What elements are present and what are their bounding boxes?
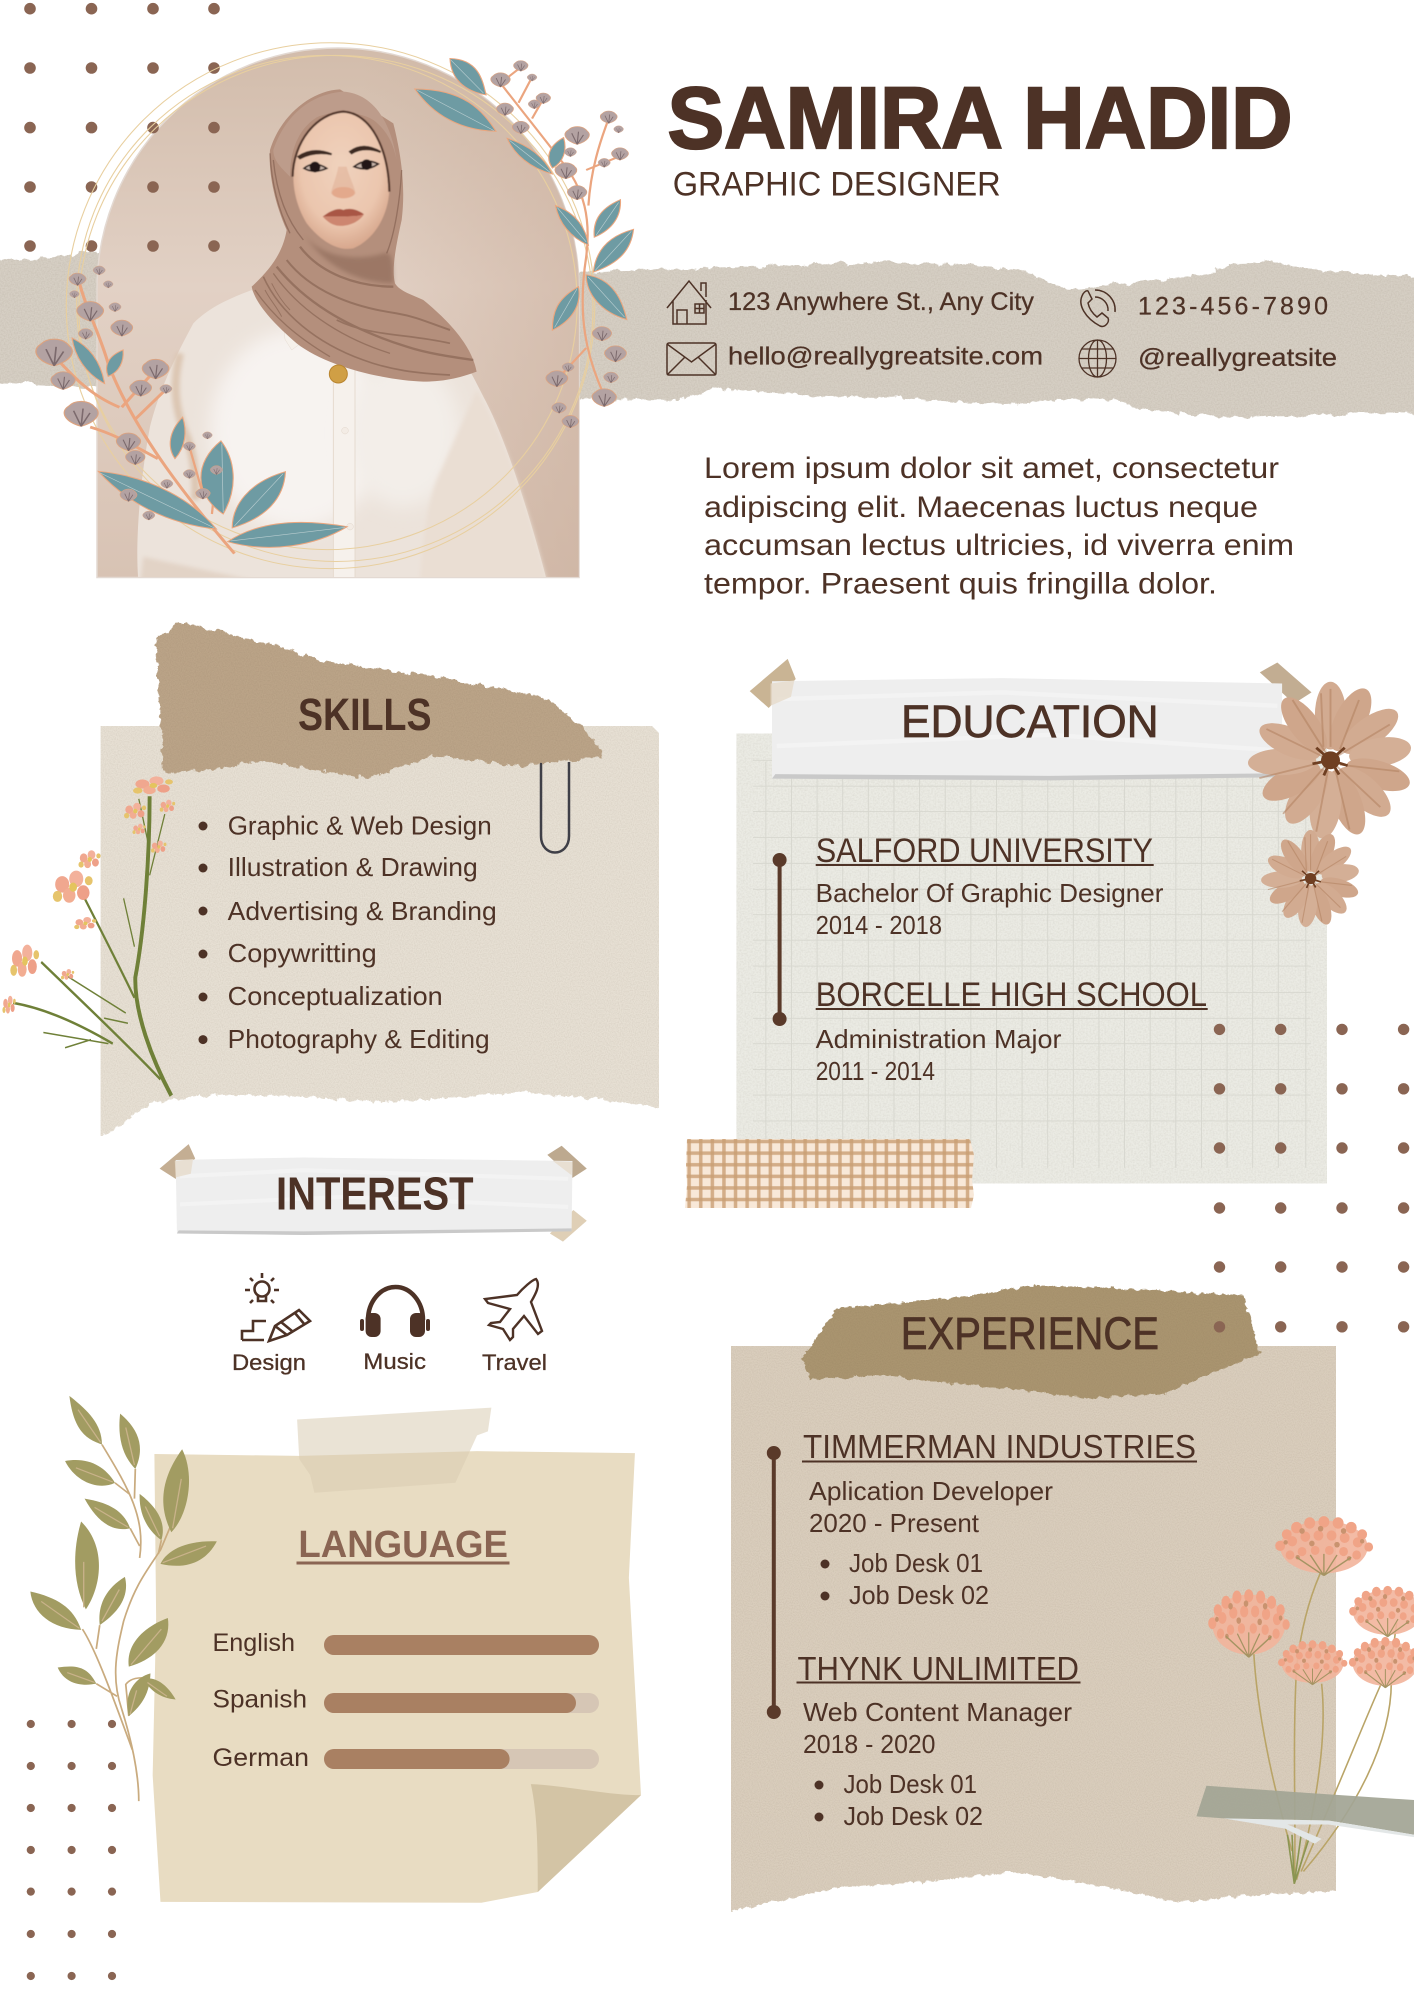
language heading: LANGUAGE: [298, 1524, 508, 1566]
address: 123 Anywhere St., Any City: [728, 288, 1034, 316]
pressed flowers with tape: [1196, 1516, 1414, 1884]
experience entry: Thynk: Job Desk 01: [844, 1769, 977, 1799]
education entry: Salford: 2014 - 2018: [816, 910, 942, 940]
experience entry: Timmerman: Aplication Developer: [809, 1476, 1053, 1506]
icon: design: [242, 1273, 310, 1341]
education entry: Borcelle: [816, 976, 1208, 1086]
experience entry: Timmerman: [802, 1428, 1197, 1610]
experience heading: EXPERIENCE: [901, 1308, 1159, 1359]
skills list: Graphic & Web Design: [228, 810, 492, 840]
intro paragraph: adipiscing elit. Maecenas luctus neque: [704, 491, 1258, 524]
watercolor flowers: [1247, 682, 1414, 928]
experience paper: [714, 1329, 1356, 1916]
experience entry: Timmerman: TIMMERMAN INDUSTRIES: [803, 1428, 1196, 1465]
white paper strip: [771, 678, 1282, 780]
dot pattern: top left: [24, 3, 220, 252]
phone number: 123-456-7890: [1138, 293, 1328, 321]
title: name: SAMIRA HADID: [668, 70, 1292, 167]
shirt: [137, 290, 547, 583]
interest heading: INTEREST: [276, 1168, 474, 1220]
intro paragraph: accumsan lectus ultricies, id viverra enim: [704, 529, 1294, 562]
kraft torn header: [156, 623, 601, 778]
brown torn header: [801, 1286, 1260, 1398]
experience entry: Thynk: THYNK UNLIMITED: [798, 1650, 1079, 1687]
panel: education: [685, 659, 1414, 1208]
icon: globe: [1079, 340, 1116, 377]
language: German: German: [212, 1744, 309, 1772]
music label: Music: [363, 1349, 426, 1374]
tape corners: [160, 1144, 587, 1242]
hijab: [252, 89, 477, 382]
sticky note: [153, 1451, 641, 1903]
skills list: Photography & Editing: [228, 1024, 490, 1054]
skills list: Advertising & Branding: [228, 896, 497, 926]
language: Spanish: Spanish: [212, 1685, 307, 1713]
plaid washi tape: [685, 1139, 974, 1208]
education entry: Borcelle: Administration Major: [816, 1024, 1062, 1054]
skills list: Copywritting: [228, 938, 377, 968]
icon: phone: [1081, 290, 1115, 326]
face: [293, 112, 389, 249]
social handle: @reallygreatsite: [1138, 344, 1337, 372]
experience entry: Thynk: [796, 1650, 1080, 1831]
skills list: Illustration & Drawing: [228, 852, 478, 882]
timeline: [773, 853, 787, 1026]
travel label: Travel: [482, 1350, 547, 1375]
icon: airplane: [485, 1279, 542, 1340]
skills list: Conceptualization: [228, 981, 443, 1011]
timeline: [767, 1446, 781, 1719]
language: English: [212, 1629, 599, 1657]
panel: skills: [2, 623, 681, 1141]
intro paragraph: [704, 452, 1294, 600]
education entry: Borcelle: BORCELLE HIGH SCHOOL: [816, 976, 1207, 1014]
banner: interest: [160, 1144, 587, 1242]
experience entry: Thynk: 2018 - 2020: [803, 1729, 936, 1759]
icon: headphones: [360, 1287, 430, 1337]
translucent tape: [297, 1408, 491, 1493]
gold button: [329, 365, 347, 383]
intro paragraph: Lorem ipsum dolor sit amet, consectetur: [704, 452, 1279, 485]
skills heading: SKILLS: [298, 689, 432, 740]
contact details: [667, 281, 1337, 377]
education entry: Salford: Bachelor Of Graphic Designer: [816, 878, 1164, 908]
education entry: Salford: SALFORD UNIVERSITY: [816, 832, 1153, 870]
intro paragraph: tempor. Praesent quis fringilla dolor.: [704, 568, 1217, 600]
white paper strip: [175, 1157, 572, 1235]
experience entry: Thynk: Web Content Manager: [803, 1697, 1072, 1727]
grid lines: [753, 760, 1311, 1168]
icon: envelope: [667, 343, 716, 375]
education entry: Salford: [816, 832, 1164, 940]
education heading: EDUCATION: [901, 696, 1159, 747]
heading underline: [296, 1562, 510, 1564]
language: German: [212, 1744, 599, 1772]
skills list: [198, 810, 497, 1054]
dot pattern: bottom left: [27, 1720, 116, 1980]
subtitle: job title: GRAPHIC DESIGNER: [673, 165, 1001, 203]
dried flower sprig: [2, 776, 175, 1096]
design label: Design: [232, 1350, 306, 1375]
experience entry: Timmerman: 2020 - Present: [809, 1508, 980, 1538]
experience entry: Thynk: Job Desk 02: [844, 1801, 983, 1831]
panel: language: [153, 1408, 641, 1903]
tape corners: [750, 659, 1312, 708]
paper clip: [541, 760, 569, 852]
email: hello@reallygreatsite.com: [728, 342, 1043, 370]
experience entry: Timmerman: Job Desk 01: [849, 1548, 983, 1578]
note fold: [531, 1784, 641, 1892]
language: English: English: [212, 1629, 295, 1657]
icon: house: [667, 281, 711, 324]
panel: experience: [714, 1286, 1414, 1916]
interest icons: [232, 1273, 547, 1375]
floral wreath around portrait: [36, 43, 634, 569]
language: Spanish: [212, 1685, 599, 1713]
torn contact ribbon background: [0, 247, 1414, 417]
experience entry: Timmerman: Job Desk 02: [849, 1580, 989, 1610]
dot pattern: right middle: [1214, 1024, 1409, 1333]
skills paper: [100, 726, 659, 1136]
education entry: Borcelle: 2011 - 2014: [816, 1056, 935, 1086]
portrait photo: [97, 47, 579, 583]
grid paper: [736, 734, 1327, 1184]
olive leaf branch: [30, 1396, 217, 1801]
